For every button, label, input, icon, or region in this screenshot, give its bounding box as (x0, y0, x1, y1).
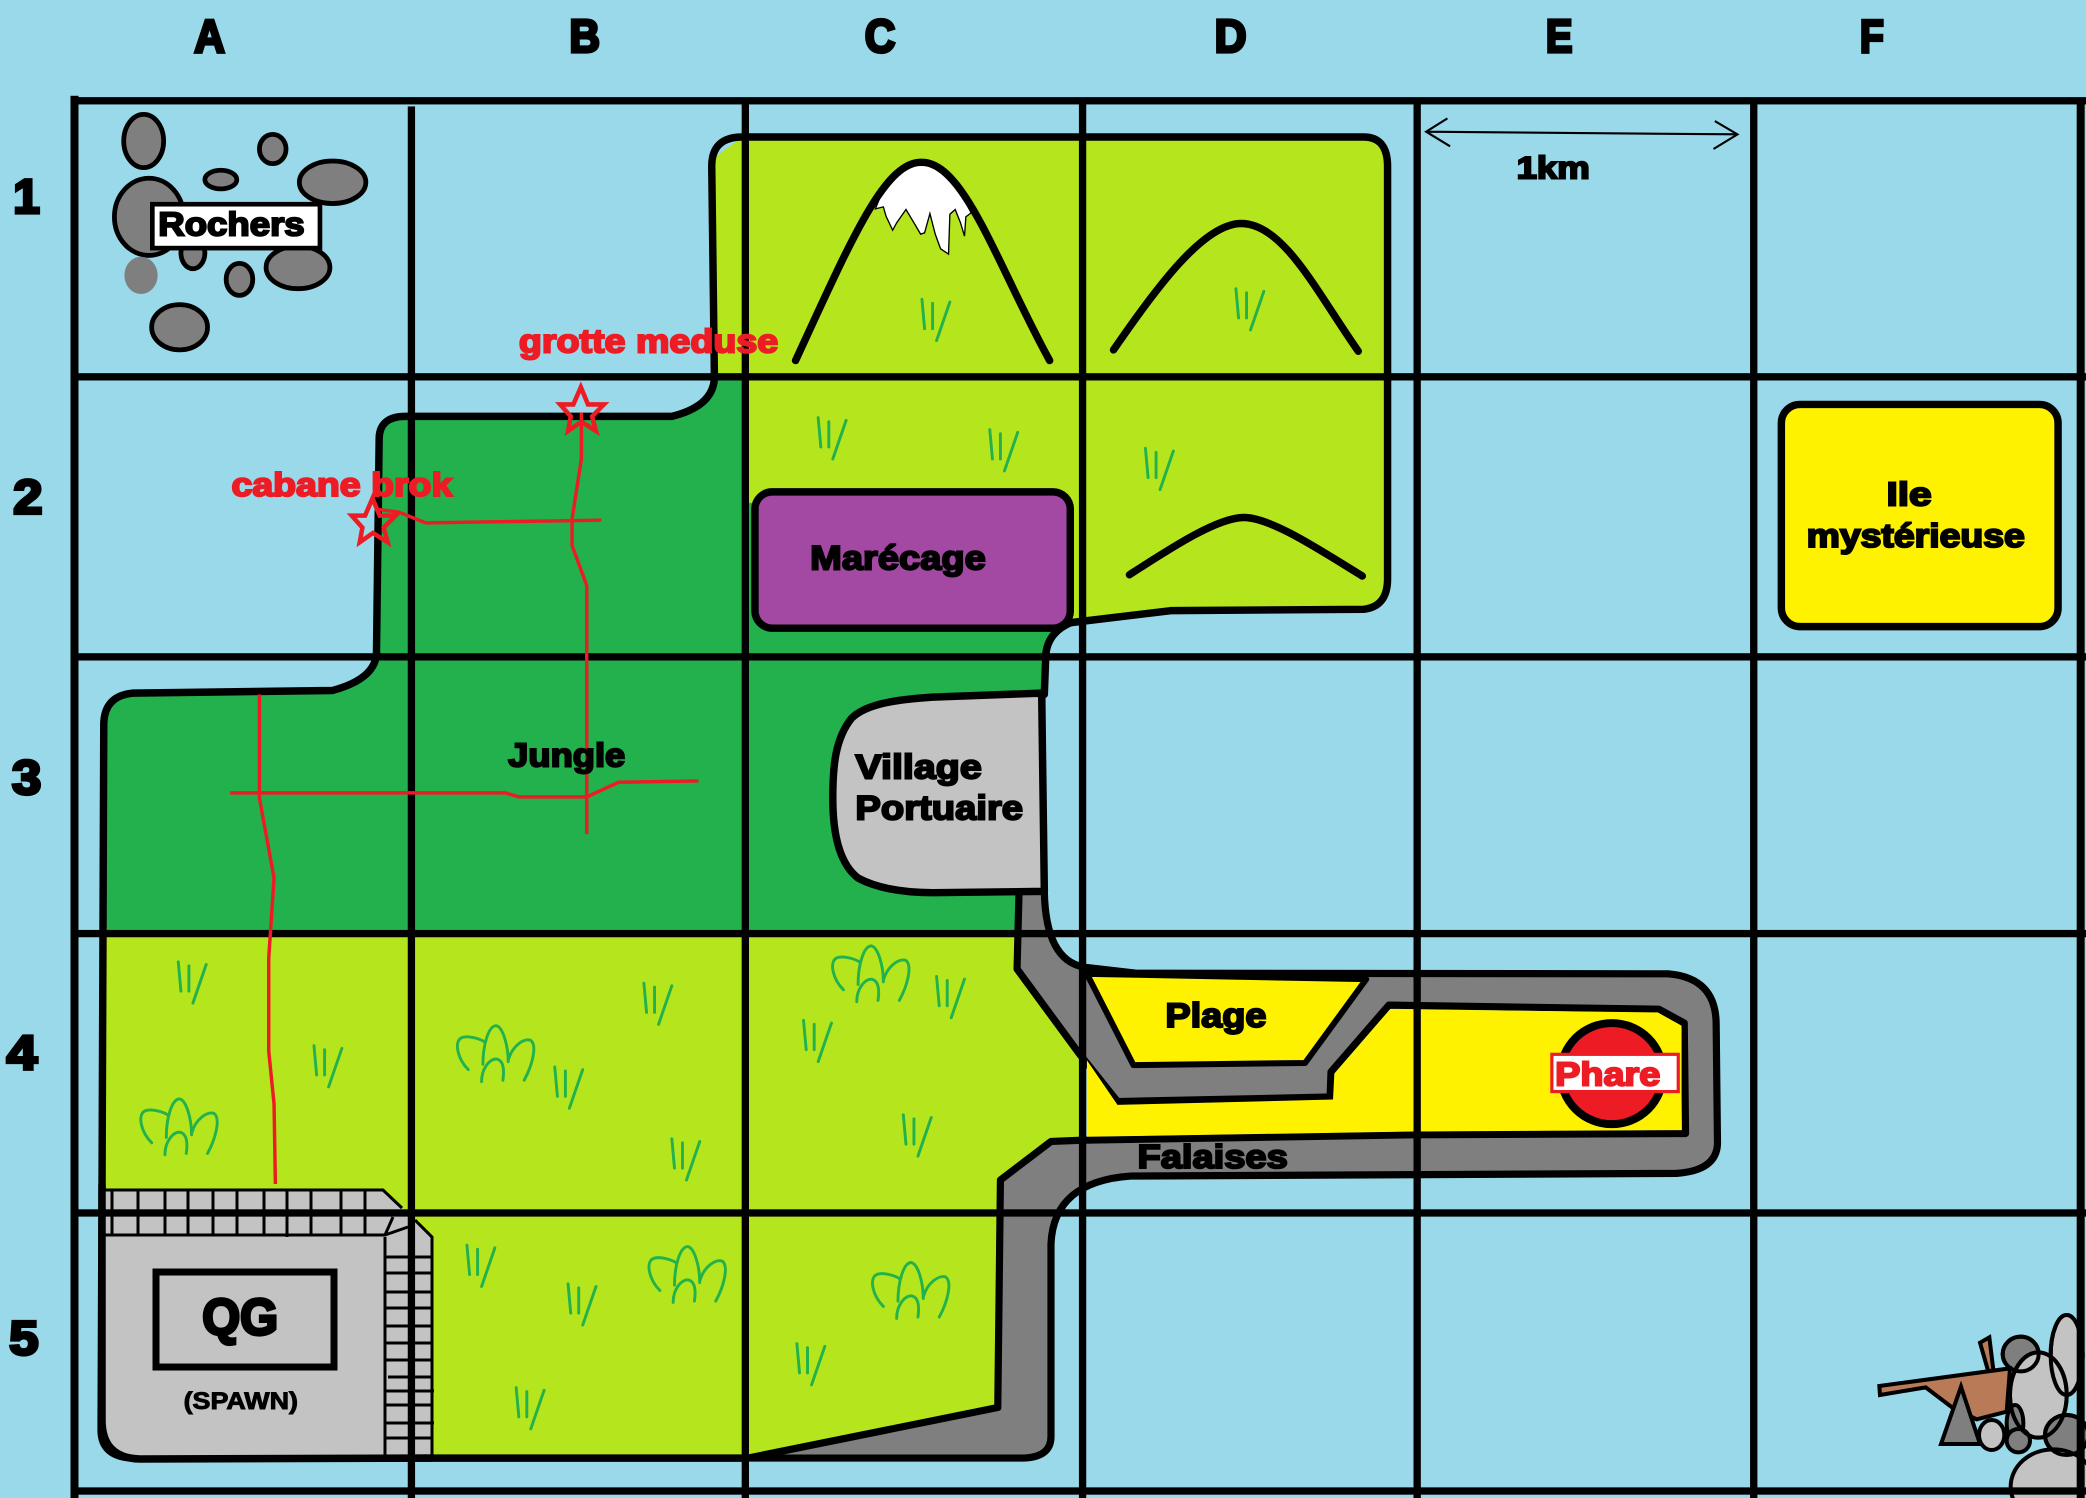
lower beach (1087, 1009, 1682, 1137)
mountain: small (1129, 518, 1362, 576)
jungle area (104, 376, 1064, 933)
label: Marécage: Marécage (810, 539, 986, 577)
mountain snow cap (875, 161, 971, 254)
column letters: B (569, 10, 600, 62)
star: cabane brok (352, 498, 396, 542)
panel: swamp Marécage (755, 492, 1070, 628)
row numbers: 1 (13, 171, 40, 224)
label: Ile mystérieuse: Ile (1886, 477, 1932, 514)
scale arrow (1426, 118, 1737, 149)
wheelbarrow and rocks, bottom right (1879, 1315, 2086, 1498)
label box: Rochers: Rochers (158, 206, 305, 243)
label: cabane brok: cabane brok (231, 467, 453, 504)
label box: Phare (1552, 1054, 1678, 1094)
cliffs: Falaises band (748, 891, 1717, 1458)
beach: Plage (1087, 974, 1366, 1065)
label: QG: QG (202, 1288, 278, 1345)
rocks: Rochers cluster (114, 114, 366, 350)
column letters: A (194, 10, 225, 62)
lighthouse: Phare disc (1561, 1023, 1663, 1124)
panel: QG base (101, 1185, 434, 1459)
row numbers: 3 (12, 752, 41, 805)
label: Village Portuaire: Village (855, 748, 982, 786)
label: Plage: Plage (1165, 997, 1267, 1035)
label: grotte meduse: grotte meduse (519, 324, 778, 361)
grass tufts (178, 289, 1264, 1429)
bushes (141, 946, 949, 1318)
row numbers (7, 171, 43, 1365)
label box: Phare: Phare (1555, 1057, 1660, 1094)
star: grotte meduse (560, 387, 604, 431)
lower grassland (101, 933, 1084, 1458)
mountain: large (796, 162, 1050, 361)
scale label: 1km (1517, 149, 1590, 185)
upper grassland with mountains (712, 137, 1388, 628)
panel: Village Portuaire (833, 693, 1044, 893)
panel: Ile mystérieuse (1781, 404, 2058, 627)
label box: Rochers (152, 204, 320, 248)
column letters: F (1860, 10, 1884, 62)
column letters: C (865, 10, 895, 62)
row numbers: 5 (9, 1312, 39, 1365)
row numbers: 2 (13, 472, 43, 525)
label: Falaises: Falaises (1137, 1139, 1288, 1176)
column letters: D (1215, 10, 1247, 62)
label: Village Portuaire (855, 748, 1023, 828)
label: Village Portuaire: Portuaire (855, 790, 1023, 828)
column letters: E (1546, 10, 1572, 62)
label: SPAWN: (SPAWN) (184, 1388, 298, 1415)
island outline (101, 137, 1388, 1458)
column letters (194, 10, 1884, 62)
mountain: medium (1114, 224, 1358, 351)
label: Ile mystérieuse (1807, 477, 2025, 555)
label: Ile mystérieuse: mystérieuse (1807, 518, 2025, 555)
label: Jungle: Jungle (508, 737, 625, 774)
red trails (230, 412, 698, 1184)
row numbers: 4 (7, 1028, 38, 1081)
